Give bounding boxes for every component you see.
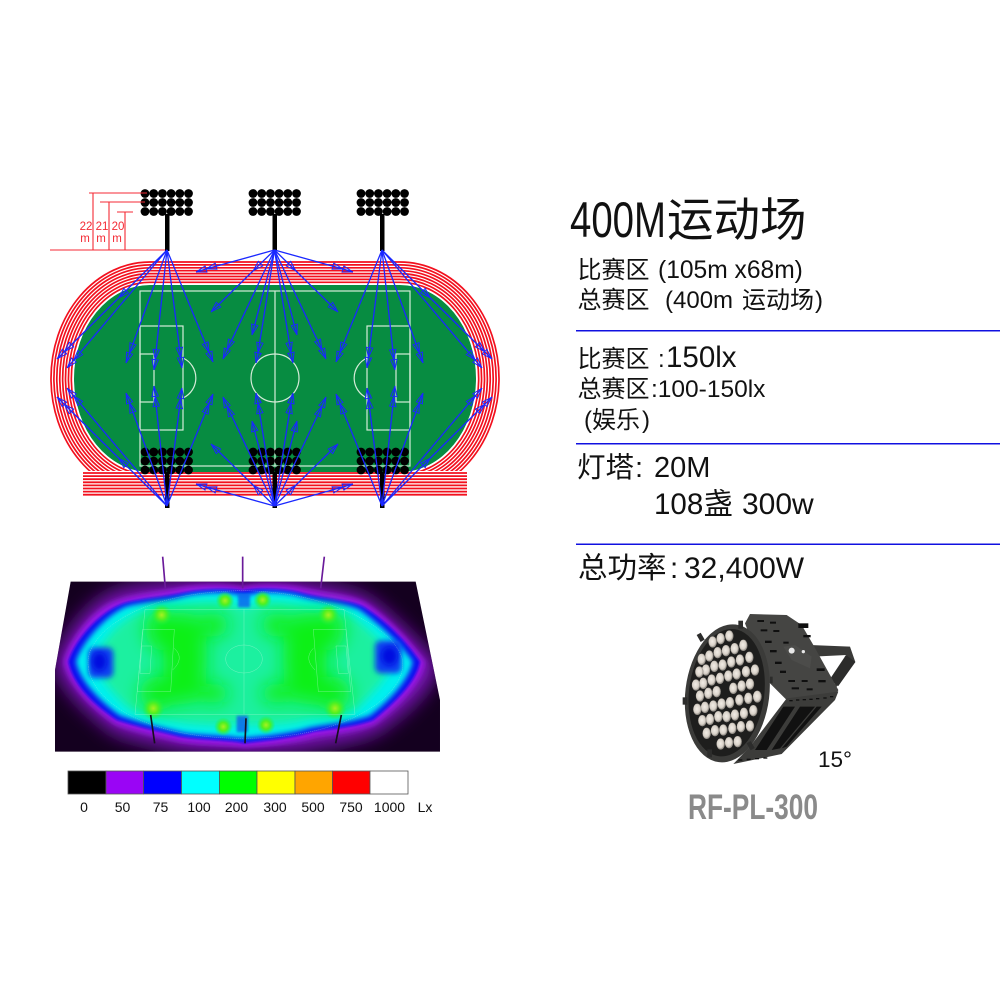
text block: tower: 灯塔 xyxy=(577,452,634,484)
text block: illuminance: : xyxy=(658,346,665,373)
blue holes at both ends xyxy=(88,647,113,678)
heatmap dark plane xyxy=(55,582,440,752)
adjustment plate xyxy=(783,645,812,668)
text block: illuminance: :100-150lx xyxy=(651,376,765,403)
tower height dimensions: m xyxy=(80,233,90,245)
text block: total power: 32,400W xyxy=(684,552,805,585)
tower height dimensions: m xyxy=(96,233,106,245)
mounting bracket xyxy=(810,645,855,697)
illuminance heatmap xyxy=(53,557,440,753)
tower height dimensions xyxy=(50,193,165,250)
text block: illuminance: ) xyxy=(642,407,650,434)
pitch outline on heatmap xyxy=(88,591,403,738)
text block: tower: 300w xyxy=(742,488,814,521)
bright green X bands xyxy=(140,610,350,710)
legend labels: 300 xyxy=(263,799,287,815)
legend labels: 75 xyxy=(153,799,168,815)
blue light beam arrows xyxy=(57,250,492,506)
green infield xyxy=(74,285,476,472)
running track lanes xyxy=(51,262,499,495)
housing slots xyxy=(738,620,833,761)
text block: field size: (400m xyxy=(665,287,733,314)
LED lenses xyxy=(692,630,762,750)
legend labels: 50 xyxy=(115,799,130,815)
legend labels: 1000 xyxy=(374,799,405,815)
model name: RF-PL-300 xyxy=(688,788,818,827)
purple band xyxy=(64,585,425,747)
text block: illuminance xyxy=(578,341,765,434)
purple halo xyxy=(53,580,438,753)
front ring xyxy=(677,619,777,767)
legend colour bar xyxy=(68,771,408,794)
text block: illuminance: 娱乐 xyxy=(592,407,640,434)
text block: tower: 20M xyxy=(654,452,710,484)
text block: tower: 盏 xyxy=(704,488,733,521)
text block: illuminance: 总赛区 xyxy=(578,376,650,403)
legend labels: Lx xyxy=(418,799,432,815)
light tower lamp arrays xyxy=(141,189,409,474)
legend labels xyxy=(80,799,432,815)
text block: tower: 108 xyxy=(654,488,703,521)
cooling fins xyxy=(755,707,822,750)
legend labels: 100 xyxy=(187,799,211,815)
lamp housing top face xyxy=(745,614,838,700)
text block: tower xyxy=(577,452,814,521)
product image: floodlight xyxy=(677,614,855,767)
text block: field size: ) xyxy=(815,287,823,314)
divider xyxy=(576,544,1000,545)
ring clips xyxy=(683,621,773,757)
beam angle label: 15° xyxy=(818,747,852,772)
blue band xyxy=(68,589,420,743)
legend labels: 0 xyxy=(80,799,88,815)
text block: illuminance: ( xyxy=(584,407,592,434)
divider xyxy=(576,330,1000,332)
text block: total power: : xyxy=(670,552,678,585)
tower markers on heatmap xyxy=(151,557,341,743)
text block: total power: 总功率 xyxy=(578,552,667,585)
cyan region xyxy=(76,592,413,738)
title: 运动场 xyxy=(667,194,806,246)
straight lanes at the bottom xyxy=(83,471,467,497)
adjustment holes xyxy=(789,648,805,654)
divider xyxy=(576,443,1000,444)
light tower poles xyxy=(165,214,384,508)
panel: stadium lighting layout xyxy=(50,189,499,508)
legend labels: 750 xyxy=(339,799,363,815)
title: 400M xyxy=(570,192,666,248)
legend labels: 500 xyxy=(301,799,325,815)
tower height dimensions: 22 xyxy=(80,221,92,233)
football pitch markings xyxy=(140,291,410,466)
text block: illuminance: 150lx xyxy=(666,341,737,374)
text block: field size: 运动场 xyxy=(742,287,814,314)
legend labels: 200 xyxy=(225,799,248,815)
green hot spots xyxy=(142,591,346,736)
illuminance legend xyxy=(68,771,432,815)
teal interior xyxy=(95,602,393,726)
tower height dimensions: m xyxy=(112,233,122,245)
blue centre notches xyxy=(238,594,250,607)
text block: tower: : xyxy=(635,452,643,484)
text block: field size: 比赛区 xyxy=(578,257,650,284)
text block: field size: 总赛区 xyxy=(578,287,650,314)
lamp housing lower face xyxy=(733,692,838,764)
text block: illuminance: 比赛区 xyxy=(578,346,650,373)
text block: field size xyxy=(578,257,823,314)
text block: field size: (105m x68m) xyxy=(658,257,803,284)
tower height dimensions: 21 xyxy=(96,221,108,233)
tower height dimensions: 20 xyxy=(112,221,124,233)
